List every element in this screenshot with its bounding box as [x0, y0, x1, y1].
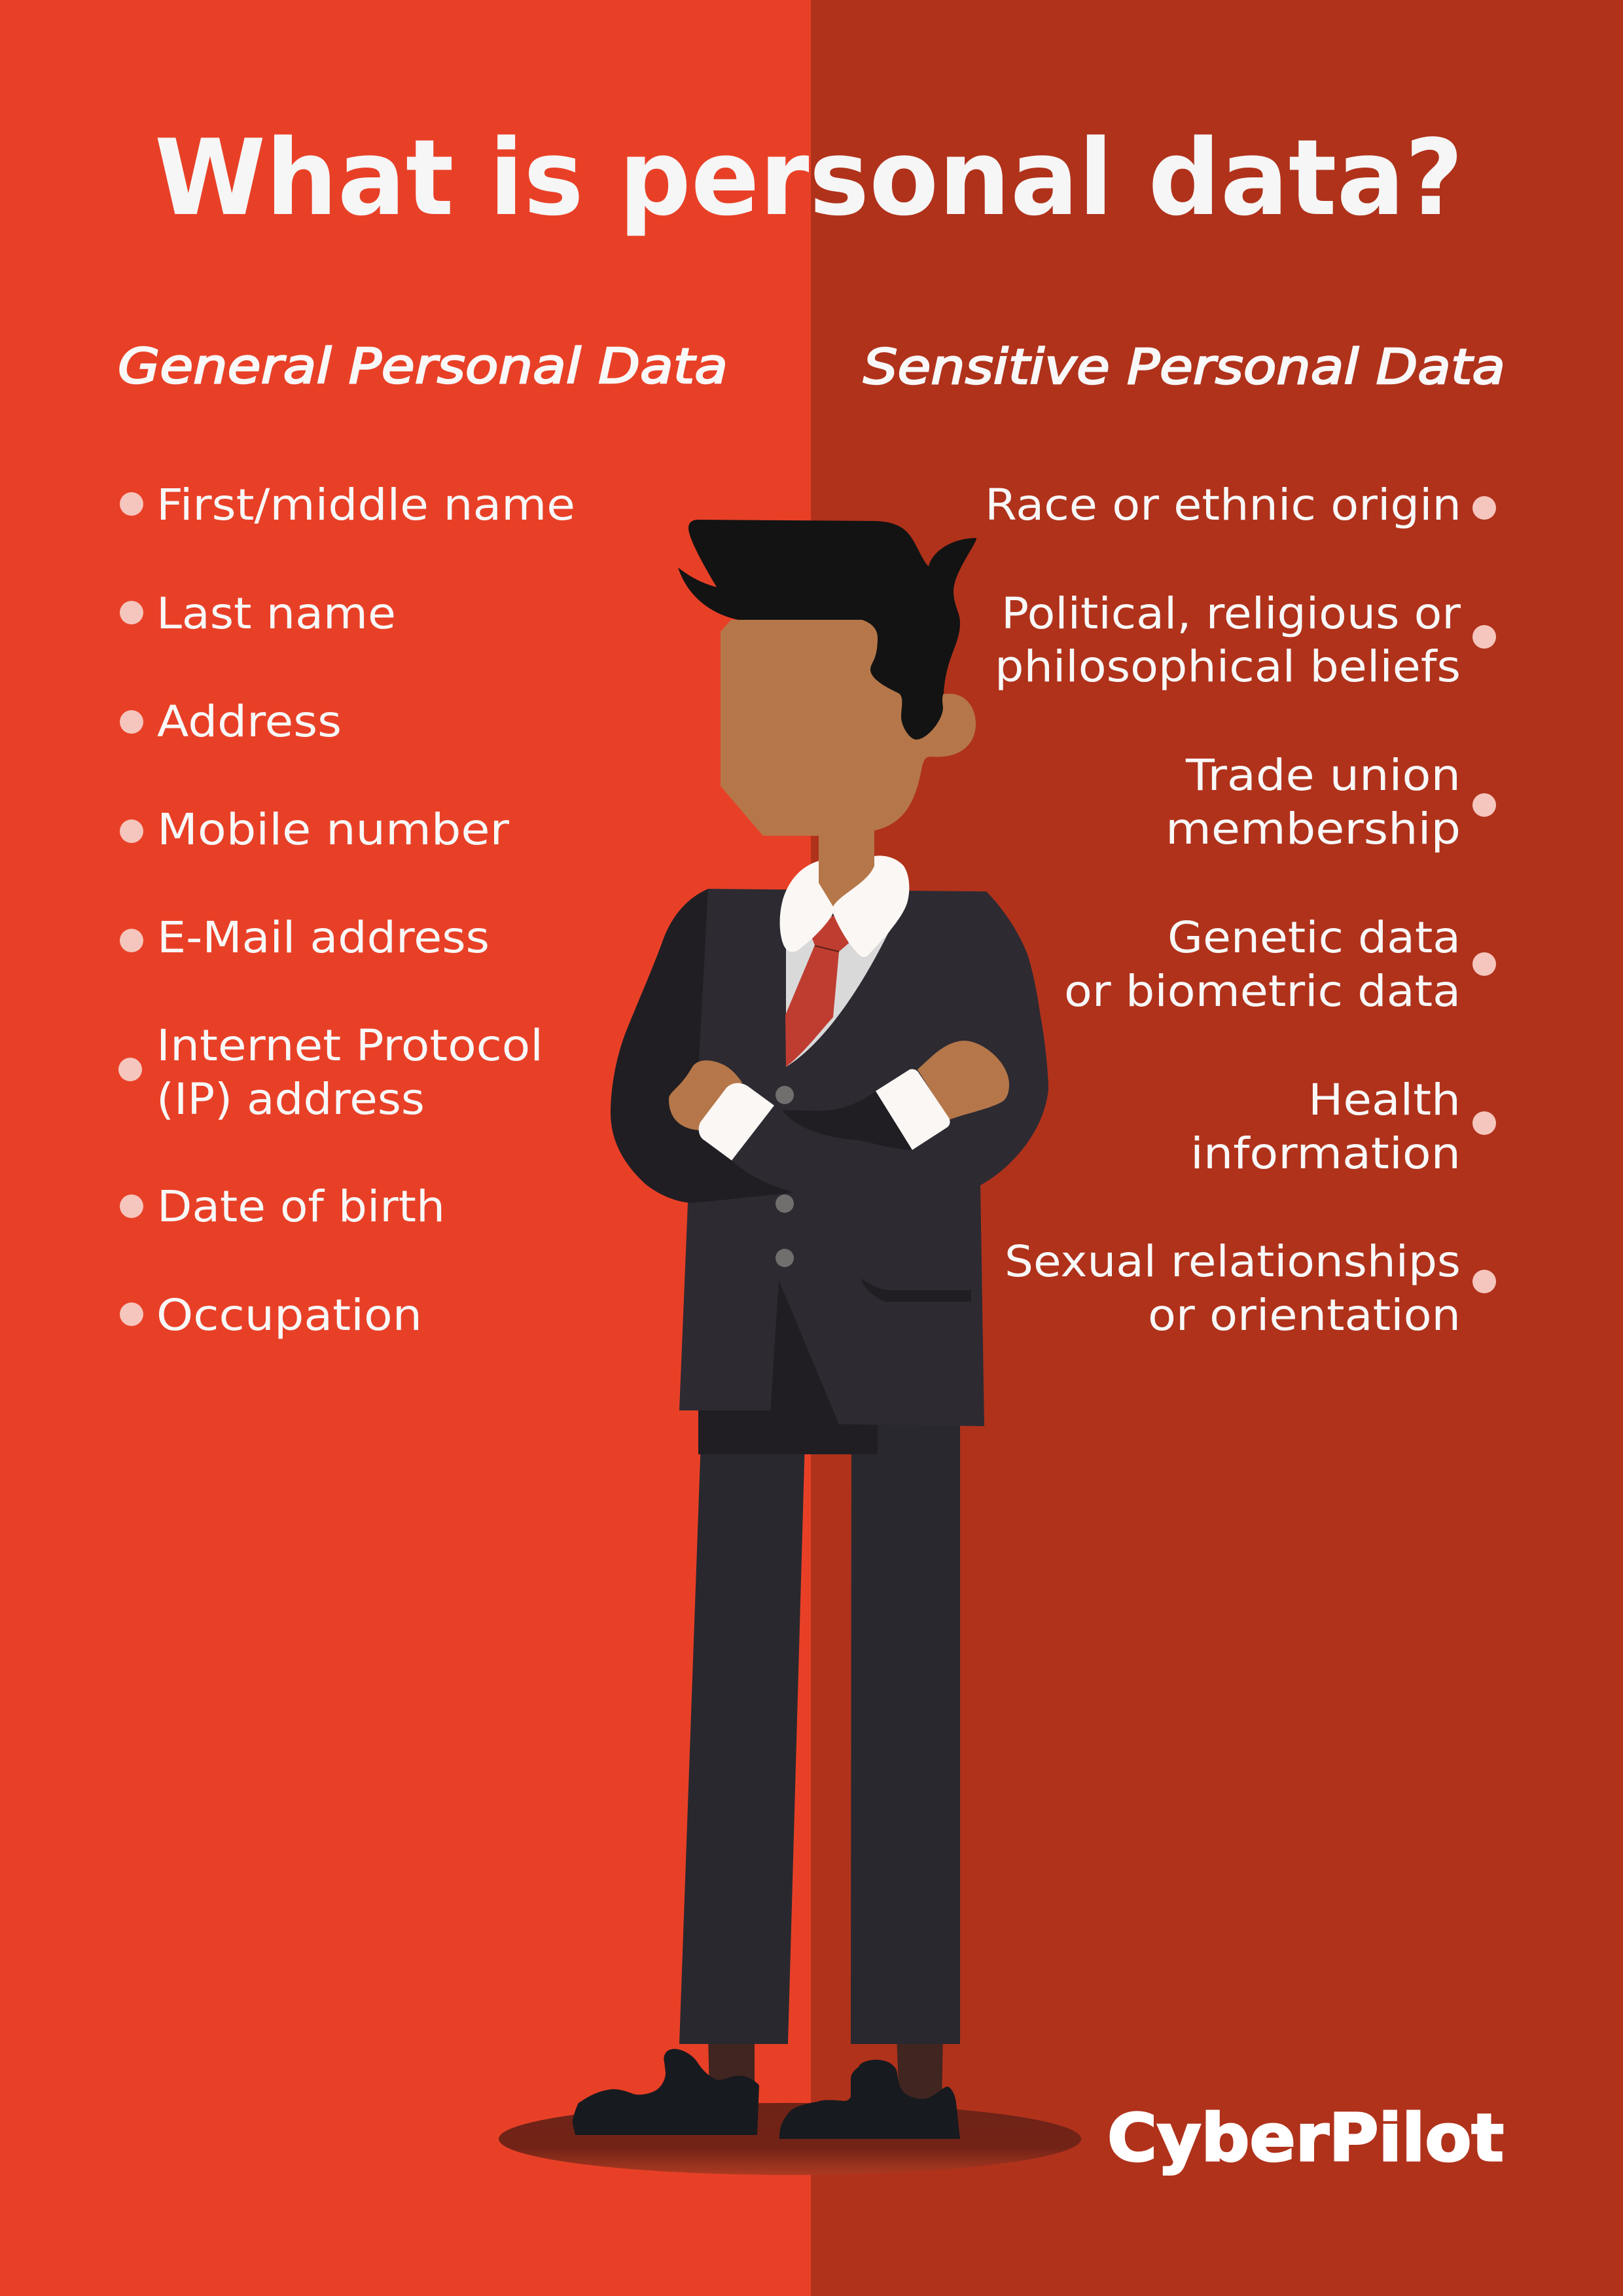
item: internet protocol address: Internet Protocol	[156, 1020, 543, 1071]
illustration: man in suit	[573, 520, 1048, 2139]
item: health information: Health	[1308, 1075, 1461, 1125]
item: political beliefs: philosophical beliefs	[995, 641, 1461, 692]
right shoe	[779, 2060, 960, 2139]
right cuff	[876, 1069, 950, 1150]
item: sexual relationships	[1005, 1236, 1496, 1340]
item: internet protocol address	[118, 1020, 543, 1124]
list: sensitive personal data	[985, 480, 1496, 1340]
item: trade union membership: membership	[1166, 804, 1461, 854]
right sleeve shadow	[783, 1091, 912, 1150]
panel: sensitive personal data background	[811, 0, 1623, 2296]
panel: general personal data background	[0, 0, 811, 2296]
item: trade union membership: Trade union	[1185, 750, 1461, 800]
item: last name: Last name	[156, 588, 396, 639]
item: date of birth: Date of birth	[157, 1181, 445, 1232]
collar left	[780, 859, 835, 952]
item: trade union membership	[1166, 750, 1496, 854]
heading: sensitive personal data: Sensitive Personal Data	[863, 339, 1505, 395]
item: political beliefs	[995, 588, 1496, 692]
heading: general personal data: General Personal Data	[118, 338, 728, 395]
dark shirt tail	[698, 1276, 878, 1454]
item: address: Address	[157, 696, 342, 747]
item: genetic data	[1064, 912, 1496, 1016]
logo: CyberPilot: CyberPilot	[1107, 2100, 1504, 2176]
illustration: ground shadow	[499, 2103, 1081, 2175]
left shoe	[573, 2049, 759, 2135]
item: e-mail address: E-Mail address	[157, 912, 490, 963]
left hand	[669, 1060, 742, 1130]
item: genetic data: or biometric data	[1064, 966, 1461, 1016]
collar right	[831, 855, 909, 957]
socks	[708, 2036, 943, 2104]
item: health information	[1190, 1075, 1496, 1179]
item: genetic data: Genetic data	[1168, 912, 1461, 963]
pocket	[861, 1278, 971, 1302]
item: race or ethnic origin: Race or ethnic origin	[985, 480, 1461, 530]
title: What is personal data?	[154, 117, 1463, 239]
right hand	[918, 1041, 1009, 1120]
list: general personal data	[118, 480, 575, 1340]
left sleeve	[611, 889, 794, 1203]
tie fold	[815, 946, 839, 952]
item: internet protocol address: (IP) address	[156, 1074, 425, 1124]
item: political beliefs: Political, religious or	[1001, 588, 1461, 639]
tie knot	[812, 914, 849, 952]
tie	[785, 945, 839, 1067]
item: sexual relationships: Sexual relationships	[1005, 1236, 1461, 1287]
hair	[678, 520, 976, 740]
jacket	[679, 889, 1048, 1426]
item: health information: information	[1190, 1128, 1461, 1179]
item: first/middle name: First/middle name	[156, 480, 575, 530]
left cuff	[699, 1083, 774, 1160]
shirt	[786, 916, 888, 1067]
trousers	[679, 1420, 960, 2044]
head and neck	[721, 620, 976, 906]
item: sexual relationships: or orientation	[1148, 1290, 1461, 1340]
item: occupation: Occupation	[156, 1290, 422, 1340]
item: mobile number: Mobile number	[157, 804, 510, 855]
buttons	[776, 1086, 794, 1267]
